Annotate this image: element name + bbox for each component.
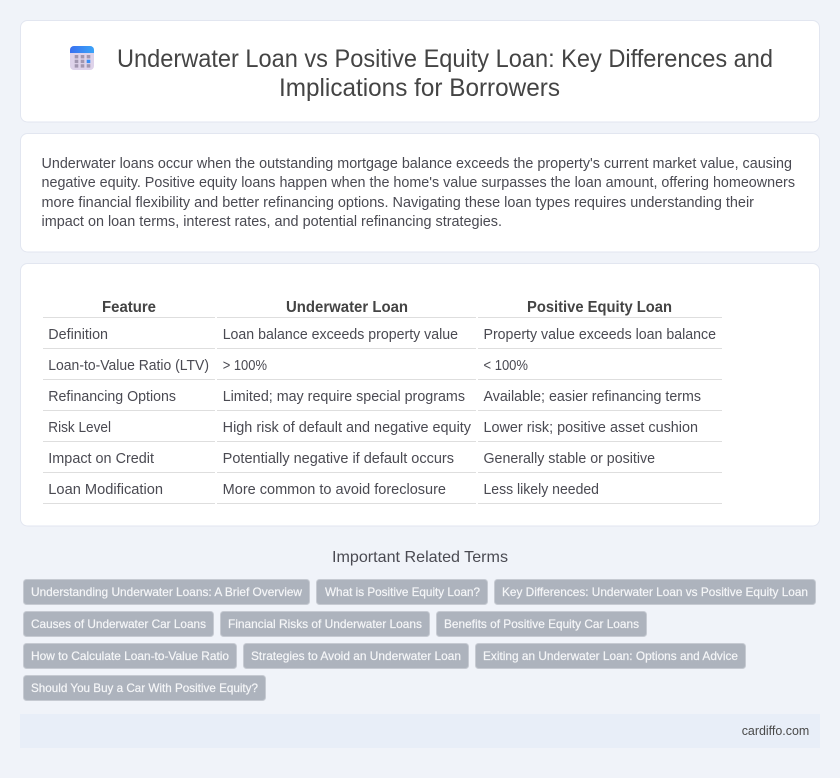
table row: impact on credit: Impact on Credit [48,451,154,467]
table row: refinancing options [48,389,701,405]
table row: definition: Definition [48,327,108,343]
table row: definition: Loan balance exceeds property value [223,327,458,343]
tag: Key Differences: Underwater Loan vs Positive Equity Loan [502,585,808,599]
related term tags [24,580,816,700]
tag [24,580,310,604]
tag: How to Calculate Loan-to-Value Ratio [31,649,229,663]
table row: loan modification [48,482,599,498]
icon: calendar [70,46,94,70]
table row: refinancing options: Refinancing Options [48,389,176,405]
table row: loan-to-value ratio: < 100% [484,358,528,374]
tag: What is Positive Equity Loan? [325,585,480,599]
tag [24,676,266,700]
tag [494,580,816,604]
tag [24,644,236,668]
tag: Should You Buy a Car With Positive Equity? [31,681,258,695]
table row: definition: Property value exceeds loan balance [484,327,716,343]
table row: risk level: Lower risk; positive asset cushion [484,420,698,436]
table header: Feature [102,299,156,316]
text block: summary paragraph: impact on loan terms, interest rates, and potential refinancing strategies. [42,214,502,230]
text block: summary paragraph: Underwater loans occur when the outstanding mortgage balance exceeds the property's current market value, causing [42,156,792,172]
table row: loan-to-value ratio: > 100% [223,358,267,374]
table row: definition [48,327,716,343]
table row: refinancing options: Available; easier refinancing terms [484,389,701,405]
panel: comparison table [20,264,820,526]
tag: Strategies to Avoid an Underwater Loan [251,649,461,663]
tag: Causes of Underwater Car Loans [31,617,206,631]
heading: important related terms: Important Related Terms [332,549,508,566]
table header [102,299,672,316]
table row: impact on credit: Generally stable or positive [484,451,655,467]
table header: Underwater Loan [286,299,408,316]
tag [24,612,214,636]
text block: summary paragraph [42,156,795,230]
tag: Exiting an Underwater Loan: Options and Advice [483,649,738,663]
table row: impact on credit: Potentially negative if default occurs [223,451,454,467]
table row: loan modification: Loan Modification [48,482,163,498]
text block: summary paragraph: negative equity. Positive equity loans happen when the home's value surpasses the loan amount, offering homeowners [42,175,795,191]
footer: cardiffo.com [742,723,809,738]
panel: summary [20,134,820,252]
footer [20,714,820,748]
table row: loan modification: Less likely needed [484,482,599,498]
tag [436,612,646,636]
table row: refinancing options: Limited; may require special programs [223,389,465,405]
table row: impact on credit [48,451,655,467]
title: Underwater Loan vs Positive Equity Loan: Key Differences and [117,45,773,73]
tag: Benefits of Positive Equity Car Loans [444,617,639,631]
tag: Understanding Underwater Loans: A Brief Overview [31,585,302,599]
tag [476,644,746,668]
table row: loan-to-value ratio [48,358,528,374]
tag [244,644,468,668]
title [117,45,773,102]
tag [220,612,430,636]
table row: risk level: Risk Level [48,420,111,436]
table row: risk level: High risk of default and negative equity [223,420,472,436]
table row: loan modification: More common to avoid foreclosure [223,482,446,498]
title: Implications for Borrowers [279,74,560,102]
tag: Financial Risks of Underwater Loans [228,617,422,631]
text block: summary paragraph: more financial flexibility and better refinancing options. Navigating these loan types requires understanding their [42,195,754,211]
table header: Positive Equity Loan [527,299,672,316]
tag [316,580,488,604]
table row: risk level [48,420,698,436]
table row: loan-to-value ratio: Loan-to-Value Ratio (LTV) [48,358,209,374]
panel: header [20,20,820,122]
